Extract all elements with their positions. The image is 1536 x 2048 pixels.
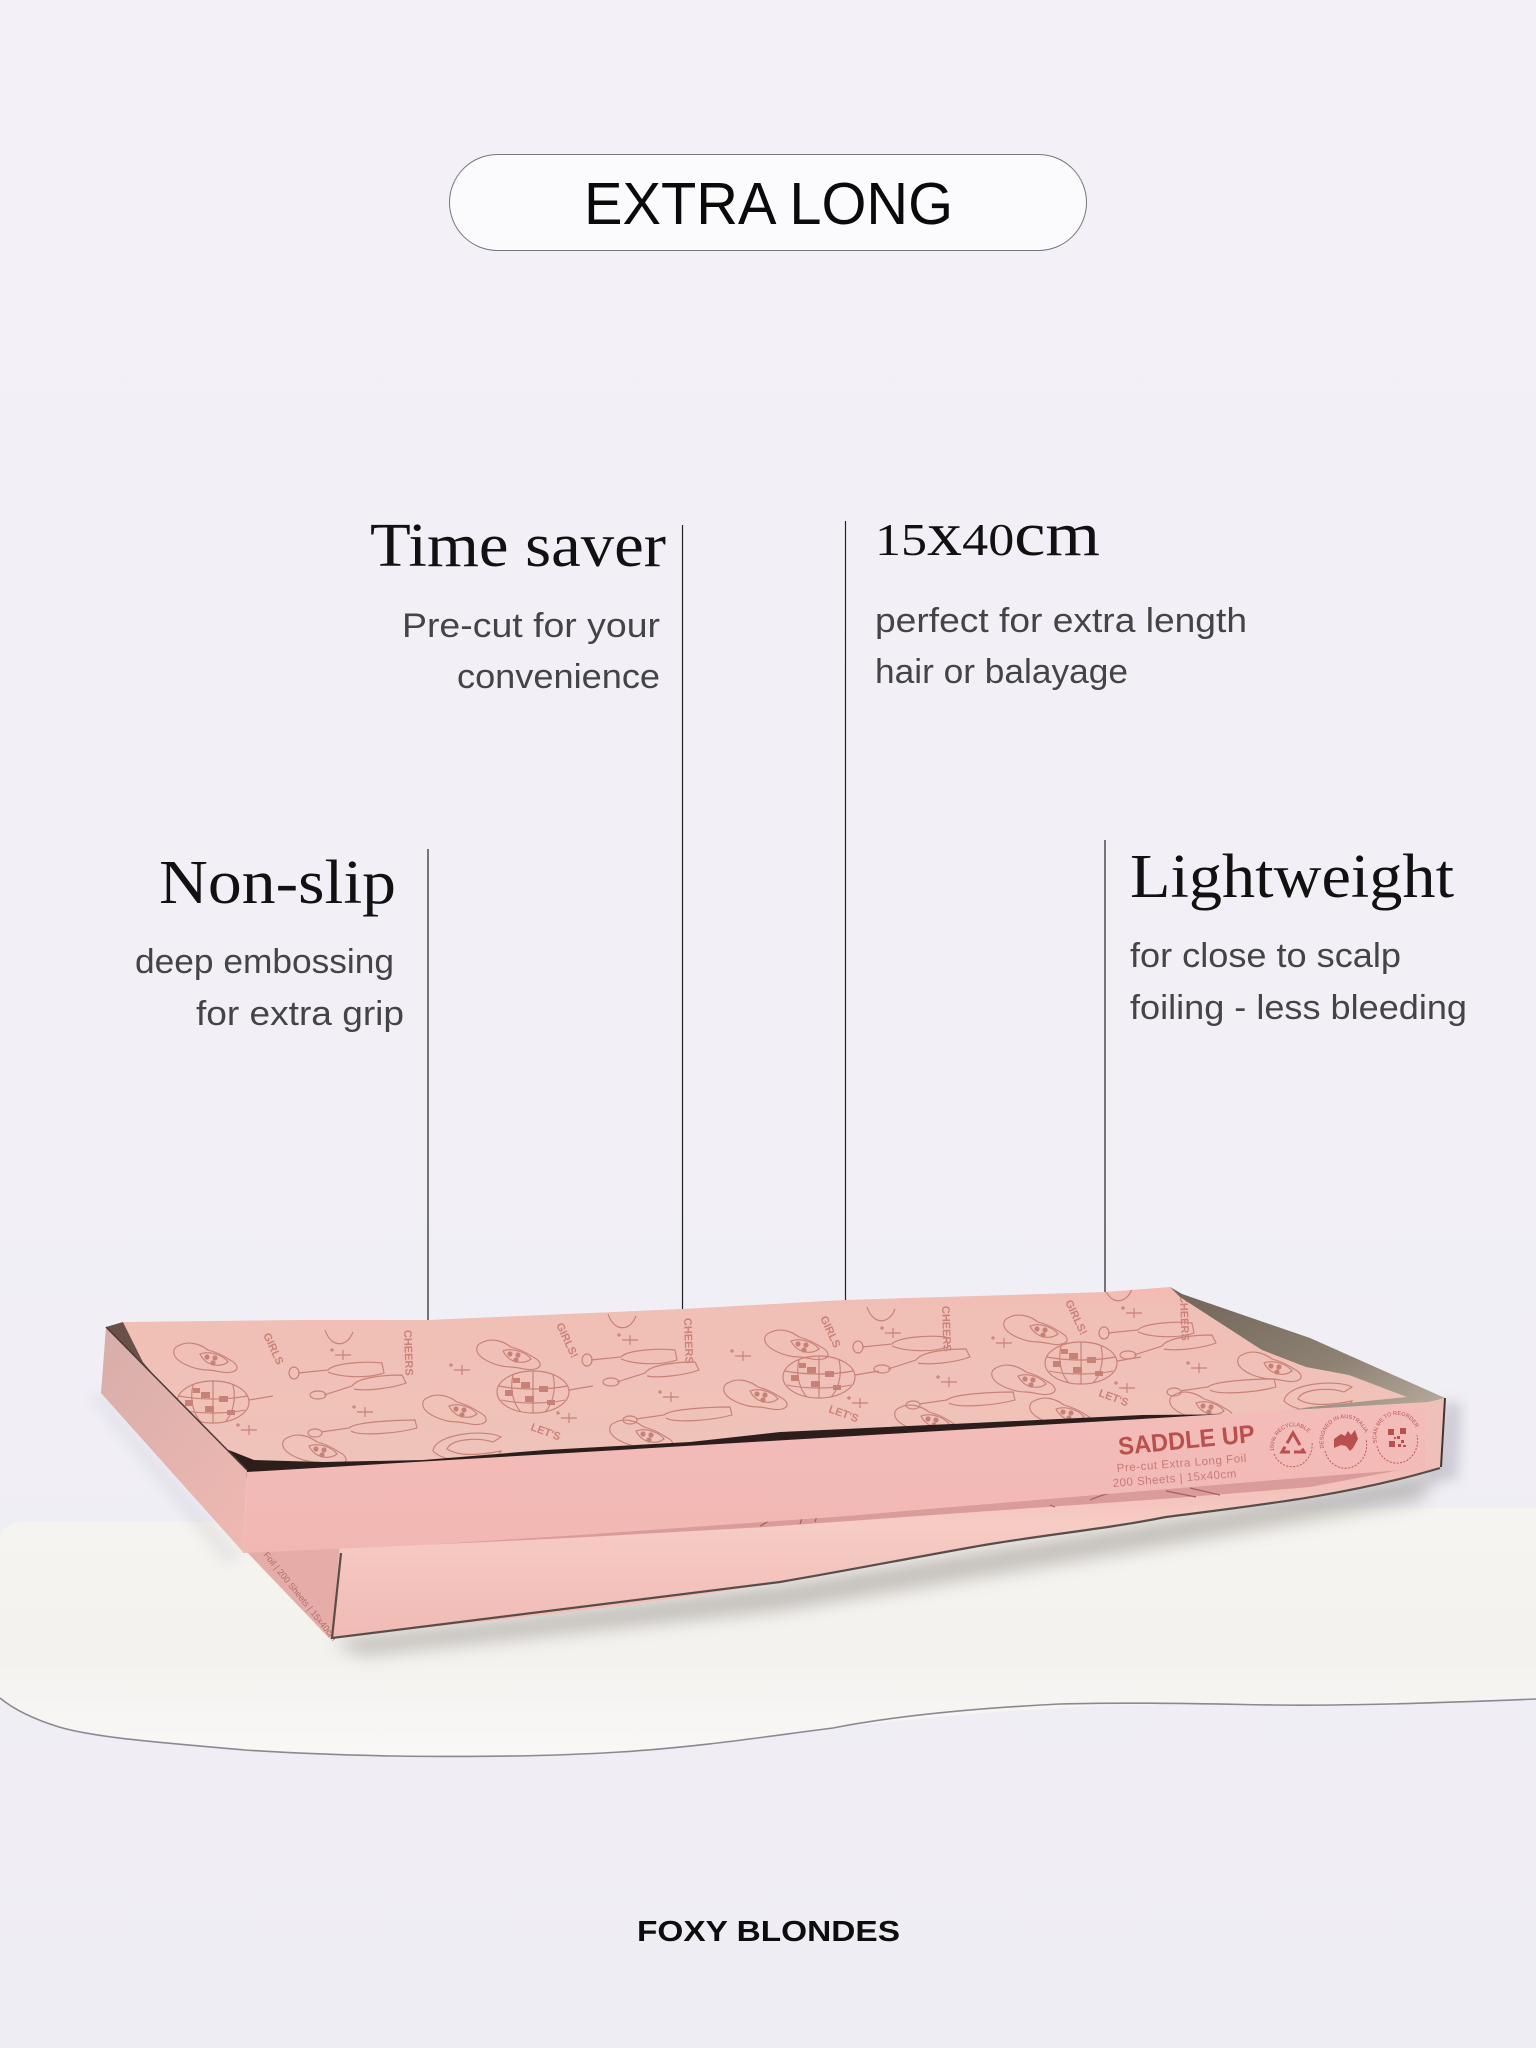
box interior [1170,1287,1445,1412]
description: size [875,602,1247,691]
description: lightweight [1130,937,1467,1027]
badge: designed in australia [1320,1414,1368,1469]
foil sheet with printed pattern: GIRLS! [1062,1298,1089,1337]
lower box front face [332,1462,1440,1638]
foil sheet with printed pattern: LET'S [1097,1388,1130,1409]
description: time saver [402,607,660,696]
heading: non-slip: Non-slip [159,849,396,917]
description: non-slip: for extra grip [196,995,404,1033]
foil sheet with printed pattern: GIRLS [817,1314,842,1350]
callout: lightweight [1105,840,1467,1293]
foil sheet with printed pattern: LET'S [827,1404,860,1425]
dark gap between foil and box edge [226,1412,1320,1478]
foil sheet with printed pattern: CHEERS [939,1306,953,1352]
foil sheet with printed pattern: GIRLS! [553,1321,580,1360]
foil sheet with printed pattern: CHEERS [401,1330,415,1376]
description: lightweight: for close to scalp [1130,937,1401,975]
description: size: perfect for extra length [875,602,1247,640]
callout: size [846,501,1247,1300]
white curved shelf [0,1508,1536,1757]
upper box left wall [101,1327,247,1552]
box label: saddle up: 200 Sheets | 15x40cm [1112,1468,1237,1490]
badge: recyclable [1270,1422,1313,1468]
title text: EXTRA LONG [584,171,953,237]
description: non-slip [135,943,404,1033]
heading: lightweight: Lightweight [1130,843,1454,911]
foil sheet with printed pattern: GIRLS [260,1331,285,1367]
badge: recyclable: 100% RECYCLABLE [1270,1422,1311,1451]
foil box product [101,1287,1446,1643]
badge: qr code [1372,1411,1418,1464]
heading: size: 15x40cm [875,501,1100,569]
foil box product: Foil | 200 Sheets | 15x40cm [261,1550,339,1643]
description: size: hair or balayage [875,653,1128,691]
badge: designed in australia: DESIGNED IN AUSTRALIA [1320,1414,1368,1448]
upper box front face [243,1402,1428,1553]
foil sheet with printed pattern: CHEERS [1177,1295,1191,1341]
callout: time saver [370,512,682,1309]
description: time saver: Pre-cut for your [402,607,660,645]
box label: saddle up [1112,1420,1256,1490]
description: non-slip: deep embossing [135,943,394,981]
box label: saddle up: Pre-cut Extra Long Foil [1116,1453,1247,1475]
box label: saddle up: SADDLE UP [1117,1420,1256,1461]
foil sheet with printed pattern [123,1287,1407,1462]
description: time saver: convenience [457,658,660,696]
box shadow [92,1390,1462,1655]
callout: non-slip [135,849,428,1320]
brand name: FOXY BLONDES [637,1916,900,1948]
badge: qr code: SCAN ME TO REORDER [1372,1411,1418,1444]
upper box right inner wall [1426,1398,1445,1468]
title pill [450,154,1086,250]
foil sheet with printed pattern: CHEERS [681,1318,695,1364]
foil sheet with printed pattern: LET'S [529,1422,562,1443]
heading: time saver: Time saver [370,512,666,580]
lower box side wall [243,1540,342,1638]
description: lightweight: foiling - less bleeding [1130,989,1467,1027]
